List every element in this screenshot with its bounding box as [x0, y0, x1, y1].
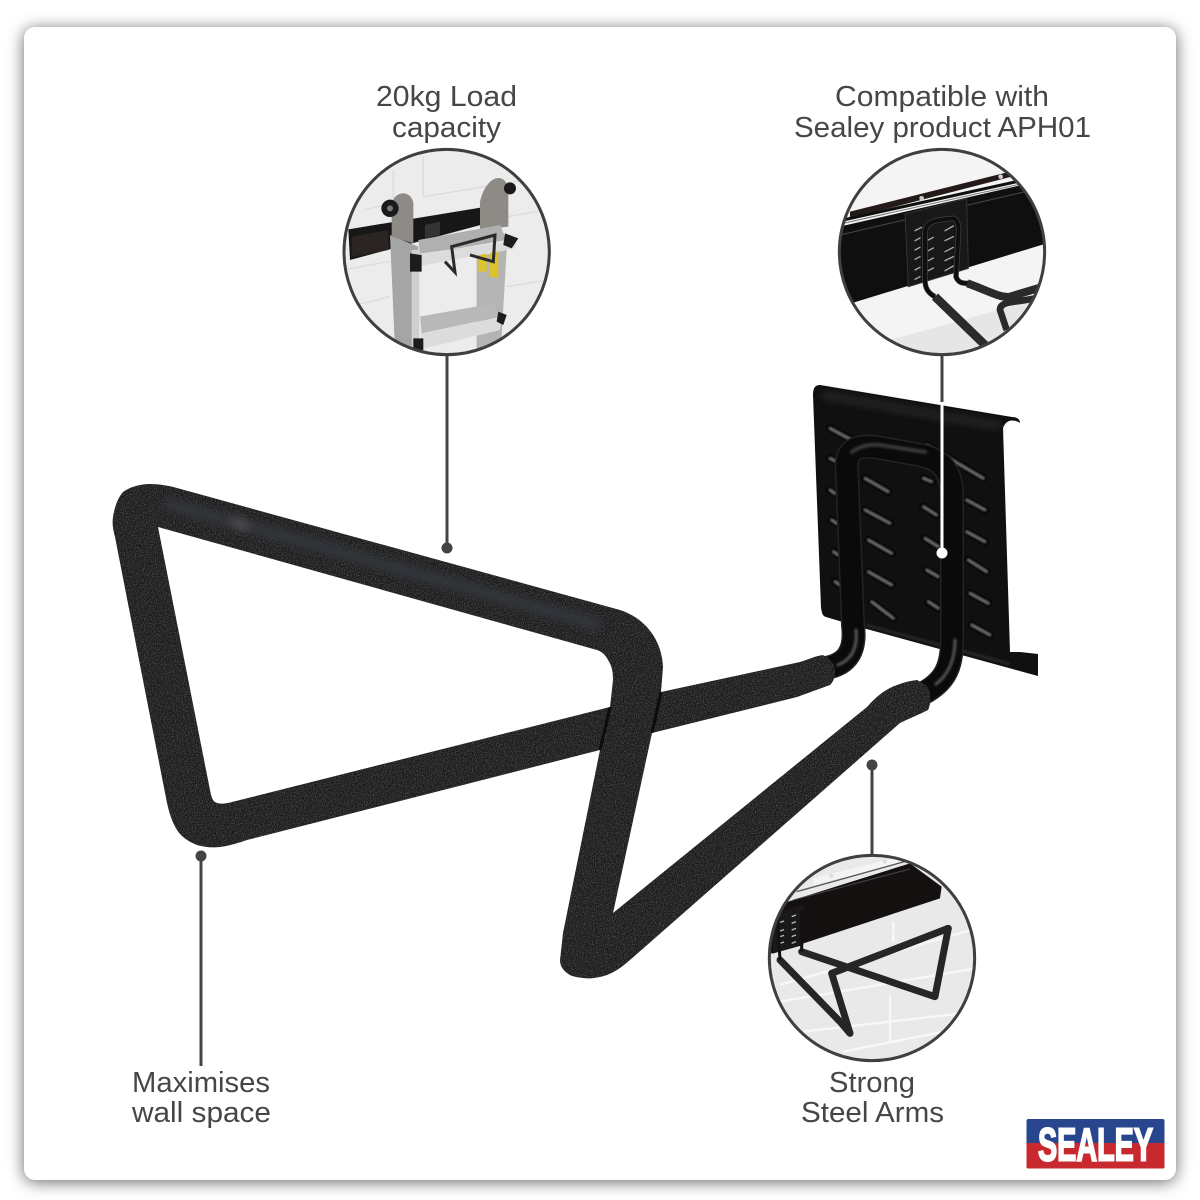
- callout text: 20kg Load capacity: [376, 81, 517, 144]
- product: foam-covered arm: [113, 484, 930, 978]
- callout text: compatible with APH01: Compatible with: [835, 81, 1049, 113]
- product: wall plate: [813, 385, 1038, 676]
- photo circle: ladder on hook: [342, 148, 551, 356]
- leader line: compatible: [936, 355, 948, 558]
- photo circle: hook on rail: [838, 148, 1046, 356]
- callout text: maximises wall space: [131, 1067, 271, 1129]
- plate slots: [830, 428, 990, 635]
- photo circle: full hook on wall: [768, 854, 976, 1062]
- callout text: maximises wall space: Maximises: [132, 1067, 270, 1099]
- leader line: wall space: [196, 850, 206, 1066]
- infographic drawing: [112, 85, 1164, 1168]
- callout text: strong steel arms: Strong: [829, 1067, 915, 1099]
- callout text: strong steel arms: [801, 1067, 944, 1129]
- foam highlights: [165, 503, 830, 752]
- callout text: 20kg Load capacity: 20kg Load: [376, 81, 517, 113]
- product: steel U hook: [826, 445, 955, 694]
- callout text: compatible with APH01: Sealey product APH01: [794, 112, 1091, 144]
- leader line: steel arms: [866, 760, 878, 856]
- leader line: load capacity: [442, 355, 452, 554]
- callout text: strong steel arms: Steel Arms: [801, 1097, 944, 1129]
- callout text: maximises wall space: wall space: [131, 1097, 271, 1129]
- callout text: compatible with APH01: [794, 81, 1091, 144]
- callout text: 20kg Load capacity: capacity: [392, 112, 502, 144]
